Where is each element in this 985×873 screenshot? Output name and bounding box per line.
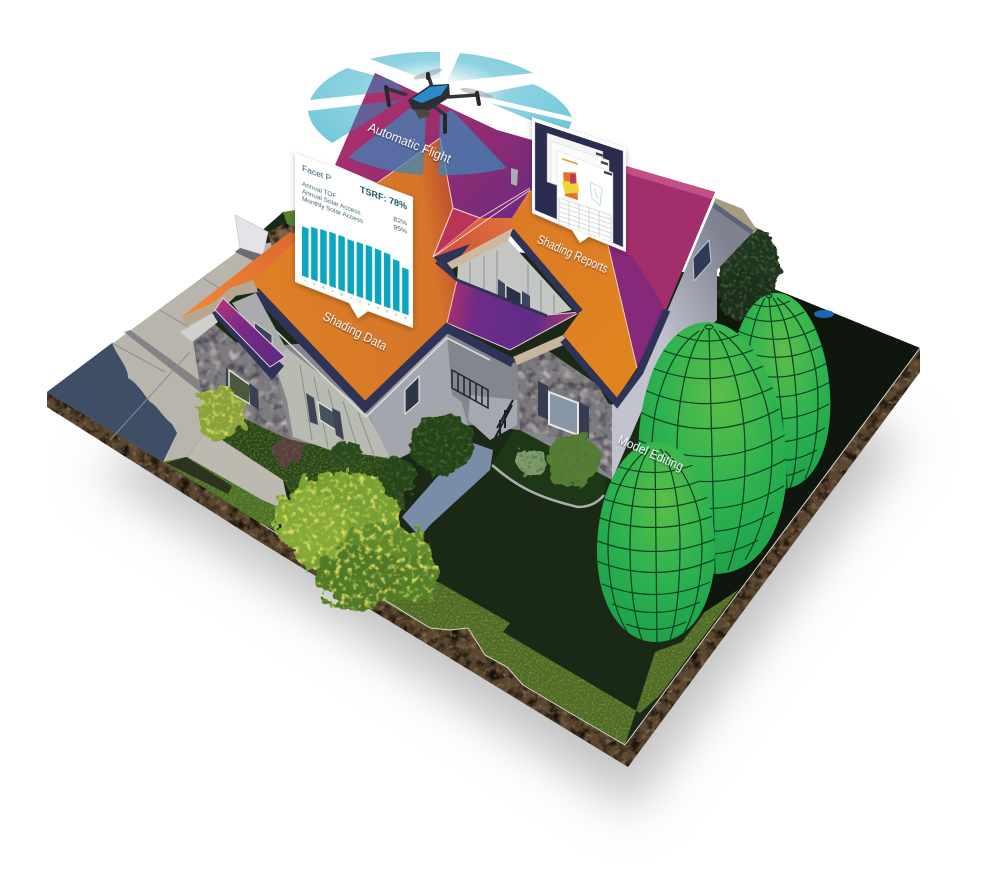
propeller blur [413, 67, 494, 100]
roof hip lines [377, 138, 637, 368]
dormer navy trim [436, 262, 547, 316]
month labels [304, 279, 407, 321]
blue top panel [412, 85, 448, 103]
sidewalk grass strip [163, 457, 290, 530]
middle egg wireframe [634, 325, 790, 574]
board and batten wall [270, 345, 392, 458]
batten lines [300, 365, 375, 458]
dormer lower roof [447, 280, 580, 350]
stat labels: Monthly Solar Access [302, 196, 364, 226]
fence shadow [235, 248, 263, 263]
dark flower border [166, 457, 232, 494]
right orange roof [510, 195, 637, 398]
right shutter [249, 383, 259, 410]
front egg body [597, 442, 715, 642]
right scan cone [438, 110, 507, 175]
facet title: Facet P [302, 163, 331, 184]
access values: 82% [393, 216, 407, 228]
month labels: M [340, 292, 343, 297]
label: automatic flight: Automatic Flight [366, 119, 454, 166]
month labels: J [359, 299, 361, 304]
centre window [405, 376, 419, 414]
access values [393, 216, 407, 236]
bar chart [302, 221, 409, 315]
large yellow-green tree [276, 472, 440, 608]
left shutter [538, 381, 548, 420]
right side wall [612, 200, 753, 480]
curb [492, 465, 604, 507]
panel: shading data card [295, 153, 413, 339]
left shutter [306, 393, 318, 425]
pool toy [814, 310, 834, 318]
front page [557, 150, 613, 243]
right round bush [547, 434, 601, 486]
trees and shrubs [198, 388, 601, 608]
porch recess [447, 333, 517, 430]
month labels: M [322, 285, 325, 290]
driveway joints [110, 278, 222, 440]
label: model editing: Model Editing [616, 432, 686, 474]
report table [559, 198, 611, 241]
right gable wall [457, 240, 572, 316]
right stone wall [517, 350, 612, 478]
dirt patch behind fence [268, 222, 296, 248]
label: shading data: Shading Data [320, 308, 390, 354]
flight path overlay on roof [348, 75, 507, 176]
lawn base [47, 212, 920, 745]
right front window [538, 381, 589, 438]
ridge highlight [621, 165, 715, 199]
back egg body [725, 291, 833, 491]
right shutter [522, 291, 530, 314]
main orange roof [253, 138, 457, 402]
left stone wall [193, 322, 290, 440]
driveway shade [47, 343, 177, 462]
dormer cream cap [447, 228, 513, 269]
right shutter [579, 402, 589, 438]
garden shrubs left of path [327, 415, 474, 498]
middle page [551, 141, 609, 202]
infographic scene [47, 52, 920, 822]
small purple roof [215, 298, 285, 367]
white frame [532, 117, 626, 258]
glass [229, 370, 250, 404]
glass [318, 402, 336, 430]
shutters [226, 368, 233, 398]
left garden lawn [200, 395, 405, 510]
month labels: D [404, 316, 407, 321]
front egg [592, 442, 720, 643]
glass [549, 392, 578, 435]
right roof upper magenta [560, 148, 715, 312]
heat map [562, 168, 579, 201]
left window [226, 368, 259, 410]
dormer navy wedge [434, 244, 470, 279]
navy backing [535, 122, 623, 247]
left gable white trim [180, 313, 218, 342]
stat labels: Annual TOF [302, 181, 336, 200]
porch floor [468, 395, 517, 440]
left cream roof tip [182, 280, 258, 326]
back egg wireframe [738, 294, 830, 488]
right navy eave [563, 310, 667, 403]
left dormer navy trim [212, 308, 284, 380]
stair rail [494, 400, 513, 440]
rear roof edge [715, 198, 757, 234]
access values: 95% [393, 224, 407, 236]
glass [506, 285, 521, 310]
camera gimbal [414, 109, 431, 119]
small gable window [254, 322, 272, 350]
centre wall [368, 333, 468, 458]
drone blade fans [308, 52, 572, 143]
ground surface [47, 210, 920, 745]
roof line diagram [590, 182, 602, 206]
grass patch behind fence [283, 210, 296, 226]
drone [385, 67, 494, 132]
gable window [498, 279, 530, 314]
right roof lower purple [608, 245, 663, 368]
month labels: O [386, 309, 389, 314]
front path [402, 443, 493, 537]
house [180, 73, 757, 480]
front wall window [306, 393, 344, 440]
front shrub [198, 388, 246, 442]
front egg wireframe [592, 449, 720, 643]
right shutter [332, 408, 344, 440]
pole shadow on driveway [124, 330, 210, 396]
grass edge outline [260, 348, 920, 745]
left orange eave [180, 232, 300, 318]
left scan cone [348, 108, 426, 175]
model trees [592, 291, 833, 643]
hosta plant [518, 449, 544, 477]
soil block edge [47, 348, 920, 767]
month labels: J [350, 296, 352, 300]
drop shadow under the block [95, 300, 908, 810]
left shutter [498, 279, 505, 302]
panel: shading reports sheet [532, 117, 626, 258]
back roof [335, 73, 715, 368]
month labels: S [377, 306, 379, 310]
legs and motors [386, 74, 479, 132]
side fence panel [235, 215, 268, 255]
orange valley strip [433, 190, 540, 263]
concrete driveway [47, 235, 300, 462]
sunlit grass band [380, 570, 738, 745]
arms [385, 75, 477, 115]
gable batten lines [470, 251, 554, 316]
label: shading reports: Shading Reports [535, 232, 611, 276]
roof vent [511, 168, 518, 186]
side window [693, 240, 711, 281]
middle egg body [632, 318, 792, 578]
month labels: J [304, 279, 306, 283]
month labels: N [395, 312, 397, 317]
month labels: A [368, 302, 371, 307]
middle egg [638, 322, 787, 574]
porch railing [452, 370, 488, 408]
dark hedge behind house [717, 228, 780, 321]
dormer cap trim [511, 231, 580, 312]
month labels: A [331, 289, 334, 294]
small gable wall [232, 293, 287, 357]
flower bed [492, 420, 610, 507]
rear fascia [713, 203, 753, 235]
card background [295, 153, 413, 339]
mauve flowering bush [271, 440, 305, 464]
main navy eave [255, 291, 513, 407]
stat labels: Annual Solar Access [302, 188, 361, 217]
eave white trim [275, 330, 490, 417]
month labels: F [313, 282, 315, 287]
sidewalk [187, 430, 290, 512]
dark fuselage [408, 84, 450, 111]
page title tags [596, 152, 603, 157]
back page [547, 133, 603, 200]
stat labels [302, 181, 364, 226]
lower right cream cap [513, 335, 568, 365]
house base silhouette [193, 333, 612, 480]
right lawn in deep shade [690, 294, 920, 620]
colour legend [562, 158, 578, 165]
fan shade on roof [349, 75, 405, 132]
back egg [738, 293, 830, 489]
centre magenta facet [433, 208, 480, 257]
TSRF value: TSRF: 78% [360, 185, 408, 212]
